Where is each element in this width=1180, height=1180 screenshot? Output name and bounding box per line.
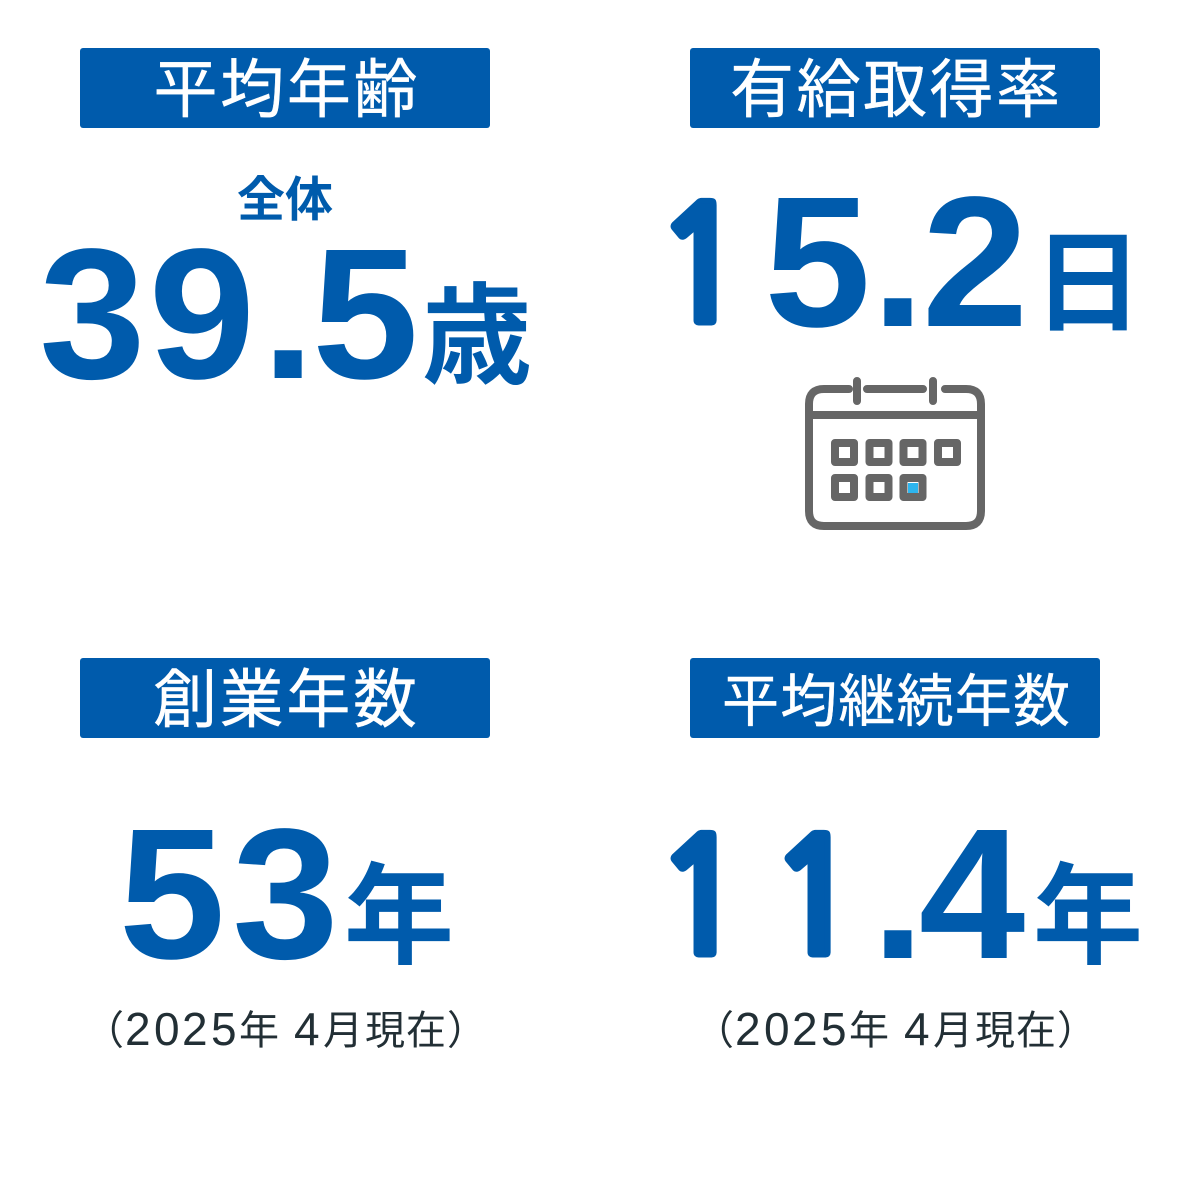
- value: 15.2 days: 日: [1033, 194, 1143, 354]
- heading: average age: 平均年齢: [154, 54, 418, 126]
- value: 53 years: 年: [344, 827, 454, 987]
- heading: average tenure: [690, 658, 1100, 738]
- panel: average tenure: [653, 658, 1143, 1056]
- value: 15.2 days: 1: [653, 187, 750, 346]
- value: 53 years: [119, 791, 454, 998]
- value: 11.4 years: 年: [1033, 827, 1143, 987]
- note: as of April 2025: 4: [294, 1003, 320, 1055]
- panel: years in business: [80, 658, 490, 1056]
- value: 11.4 years: 11: [653, 819, 864, 978]
- label: overall: 全体: [237, 174, 333, 227]
- value: 15.2 days: 5.2: [764, 159, 1028, 366]
- note: as of April 2025: [84, 998, 487, 1056]
- panel: paid leave: [653, 48, 1143, 526]
- heading: average tenure: 平均継続年数: [722, 670, 1070, 734]
- value: 39.5 years: 歳: [422, 247, 532, 407]
- heading: years in business: 創業年数: [153, 664, 417, 736]
- heading: average age: [80, 48, 490, 128]
- value: 39.5 years: 39.5: [39, 211, 419, 418]
- panel: average age: [39, 48, 532, 418]
- note: as of April 2025: （: [84, 998, 124, 1056]
- heading: years in business: [80, 658, 490, 738]
- note: as of April 2025: 4: [904, 1003, 930, 1055]
- note: as of April 2025: [694, 998, 1097, 1056]
- note: as of April 2025: 月現在）: [933, 998, 1097, 1056]
- value: 53 years: 53: [119, 791, 339, 998]
- heading: paid leave: 有給取得率: [730, 54, 1060, 126]
- note: as of April 2025: 2025: [125, 1003, 237, 1055]
- note: as of April 2025: 月現在）: [323, 998, 487, 1056]
- value: 11.4 years: [653, 791, 1143, 998]
- note: as of April 2025: 年: [239, 998, 279, 1056]
- icon: calendar: [809, 381, 981, 526]
- value: 11.4 years: .4: [871, 791, 1025, 998]
- note: as of April 2025: 年: [849, 998, 889, 1056]
- note: as of April 2025: （: [694, 998, 734, 1056]
- value: 15.2 days: [653, 159, 1143, 366]
- note: as of April 2025: 2025: [735, 1003, 847, 1055]
